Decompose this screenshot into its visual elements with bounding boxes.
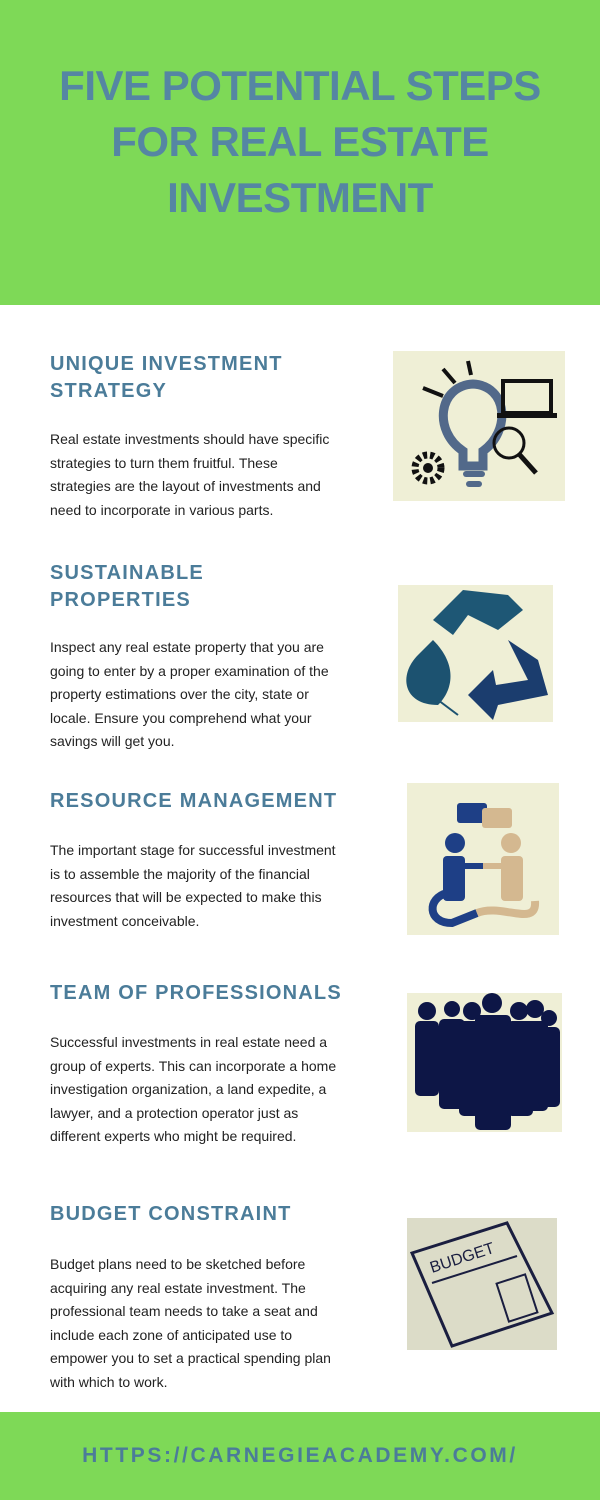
text: strategy: strategies to turn them fruitful. These: [50, 455, 278, 471]
text: sustainable: locale. Ensure you comprehend what your: [50, 710, 311, 726]
text: budget: with which to work.: [50, 1374, 167, 1390]
title: [59, 62, 541, 221]
icon: recycle leaf: [398, 585, 553, 722]
text: strategy: [50, 431, 329, 518]
icon: team silhouettes: [407, 993, 562, 1132]
heading: resource management: RESOURCE MANAGEMENT: [50, 790, 337, 812]
text: resource: resources that will be expected to make this: [50, 889, 322, 905]
text: team: different experts who might be required.: [50, 1128, 296, 1144]
title: FIVE POTENTIAL STEPS: [59, 62, 541, 109]
icon: lightbulb: [393, 351, 565, 501]
footer band: [0, 1412, 600, 1500]
text: team: Successful investments in real estate need a: [50, 1034, 327, 1050]
title: INVESTMENT: [167, 174, 433, 221]
text: team: investigation organization, a land expedite, a: [50, 1081, 326, 1097]
text: resource: investment conceivable.: [50, 913, 199, 929]
heading: budget constraint: BUDGET CONSTRAINT: [50, 1203, 292, 1225]
heading: sustainable properties: [50, 562, 204, 611]
text: team: lawyer, and a protection operator just as: [50, 1105, 298, 1121]
text: resource: The important stage for successful investment: [50, 842, 336, 858]
text: budget: empower you to set a practical spending plan: [50, 1350, 331, 1366]
text: sustainable: going to enter by a proper examination of the: [50, 663, 329, 679]
heading: unique investment strategy: STRATEGY: [50, 380, 167, 402]
text: resource: is to assemble the majority of the financial: [50, 866, 310, 882]
text: team: group of experts. This can incorporate a home: [50, 1058, 336, 1074]
text: budget: Budget plans need to be sketched before: [50, 1256, 305, 1272]
title: FOR REAL ESTATE: [111, 118, 489, 165]
text: sustainable: property estimations over the city, state or: [50, 686, 309, 702]
text: budget: [50, 1256, 331, 1390]
text: sustainable: [50, 639, 329, 749]
text: team: [50, 1034, 336, 1144]
text: budget: acquiring any real estate investment. The: [50, 1280, 306, 1296]
heading: unique investment strategy: [50, 353, 283, 402]
icon: budget notebook: BUDGET: [428, 1240, 497, 1277]
text: strategy: strategies are the layout of investments and: [50, 478, 321, 494]
text: strategy: Real estate investments should have specific: [50, 431, 329, 447]
text: sustainable: Inspect any real estate property that you are: [50, 639, 324, 655]
text: resource: [50, 842, 336, 929]
text: budget: professional team needs to take a seat and: [50, 1303, 318, 1319]
text: strategy: need to incorporate in various parts.: [50, 502, 273, 518]
heading: sustainable properties: PROPERTIES: [50, 589, 191, 611]
header band: [0, 0, 600, 305]
text: budget: include each zone of anticipated use to: [50, 1327, 292, 1343]
heading: sustainable properties: SUSTAINABLE: [50, 562, 204, 584]
heading: team of professionals: TEAM OF PROFESSIONALS: [50, 982, 342, 1004]
text: sustainable: savings will get you.: [50, 733, 175, 749]
footer url: HTTPS://CARNEGIEACADEMY.COM/: [82, 1444, 518, 1467]
icon: budget notebook: [407, 1218, 557, 1350]
heading: unique investment strategy: UNIQUE INVESTMENT: [50, 353, 283, 375]
icon: handshake people: [407, 783, 559, 935]
